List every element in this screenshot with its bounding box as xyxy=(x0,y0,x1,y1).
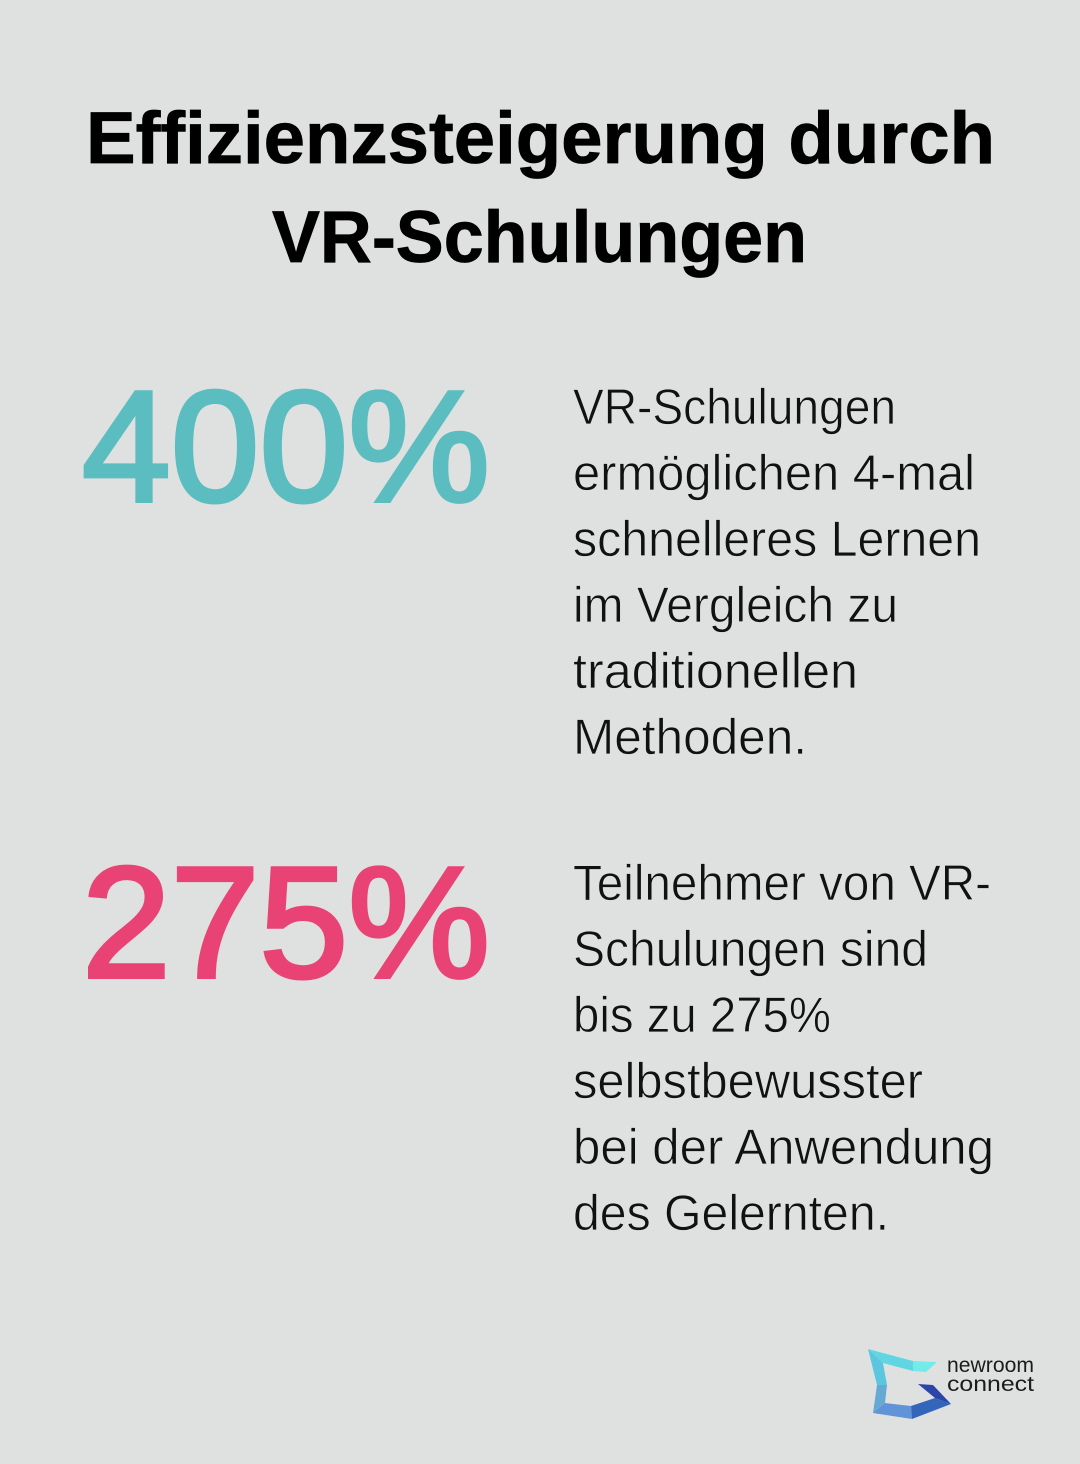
statistic: 275%: 275% xyxy=(82,835,490,1011)
text block: confidence: Teilnehmer von VR- xyxy=(573,855,991,911)
logo: newroom connect xyxy=(868,1349,1034,1419)
text block: confidence: selbstbewusster xyxy=(573,1053,923,1109)
logo wordmark xyxy=(947,1354,1034,1396)
text block: faster learning: VR-Schulungen xyxy=(573,379,896,435)
icon: logo mark xyxy=(868,1349,951,1419)
logo wordmark: newroom xyxy=(947,1354,1034,1377)
text block: faster learning: traditionellen xyxy=(573,643,858,699)
text block: confidence xyxy=(573,855,994,1241)
logo wordmark: connect xyxy=(947,1373,1034,1396)
text block: confidence: bei der Anwendung xyxy=(573,1119,994,1175)
text block: faster learning: Methoden. xyxy=(573,709,807,765)
text block: faster learning: schnelleres Lernen xyxy=(573,511,981,567)
text block: confidence: bis zu 275% xyxy=(573,987,831,1043)
statistic: 400%: 400% xyxy=(82,359,490,535)
title: VR-Schulungen xyxy=(272,197,807,278)
text block: confidence: des Gelernten. xyxy=(573,1185,889,1241)
text block: faster learning xyxy=(573,379,981,765)
title: Effizienzsteigerung durch xyxy=(86,98,995,179)
text block: faster learning: ermöglichen 4-mal xyxy=(573,445,975,501)
text block: faster learning: im Vergleich zu xyxy=(573,577,898,633)
text block: confidence: Schulungen sind xyxy=(573,921,928,977)
title xyxy=(86,98,995,278)
